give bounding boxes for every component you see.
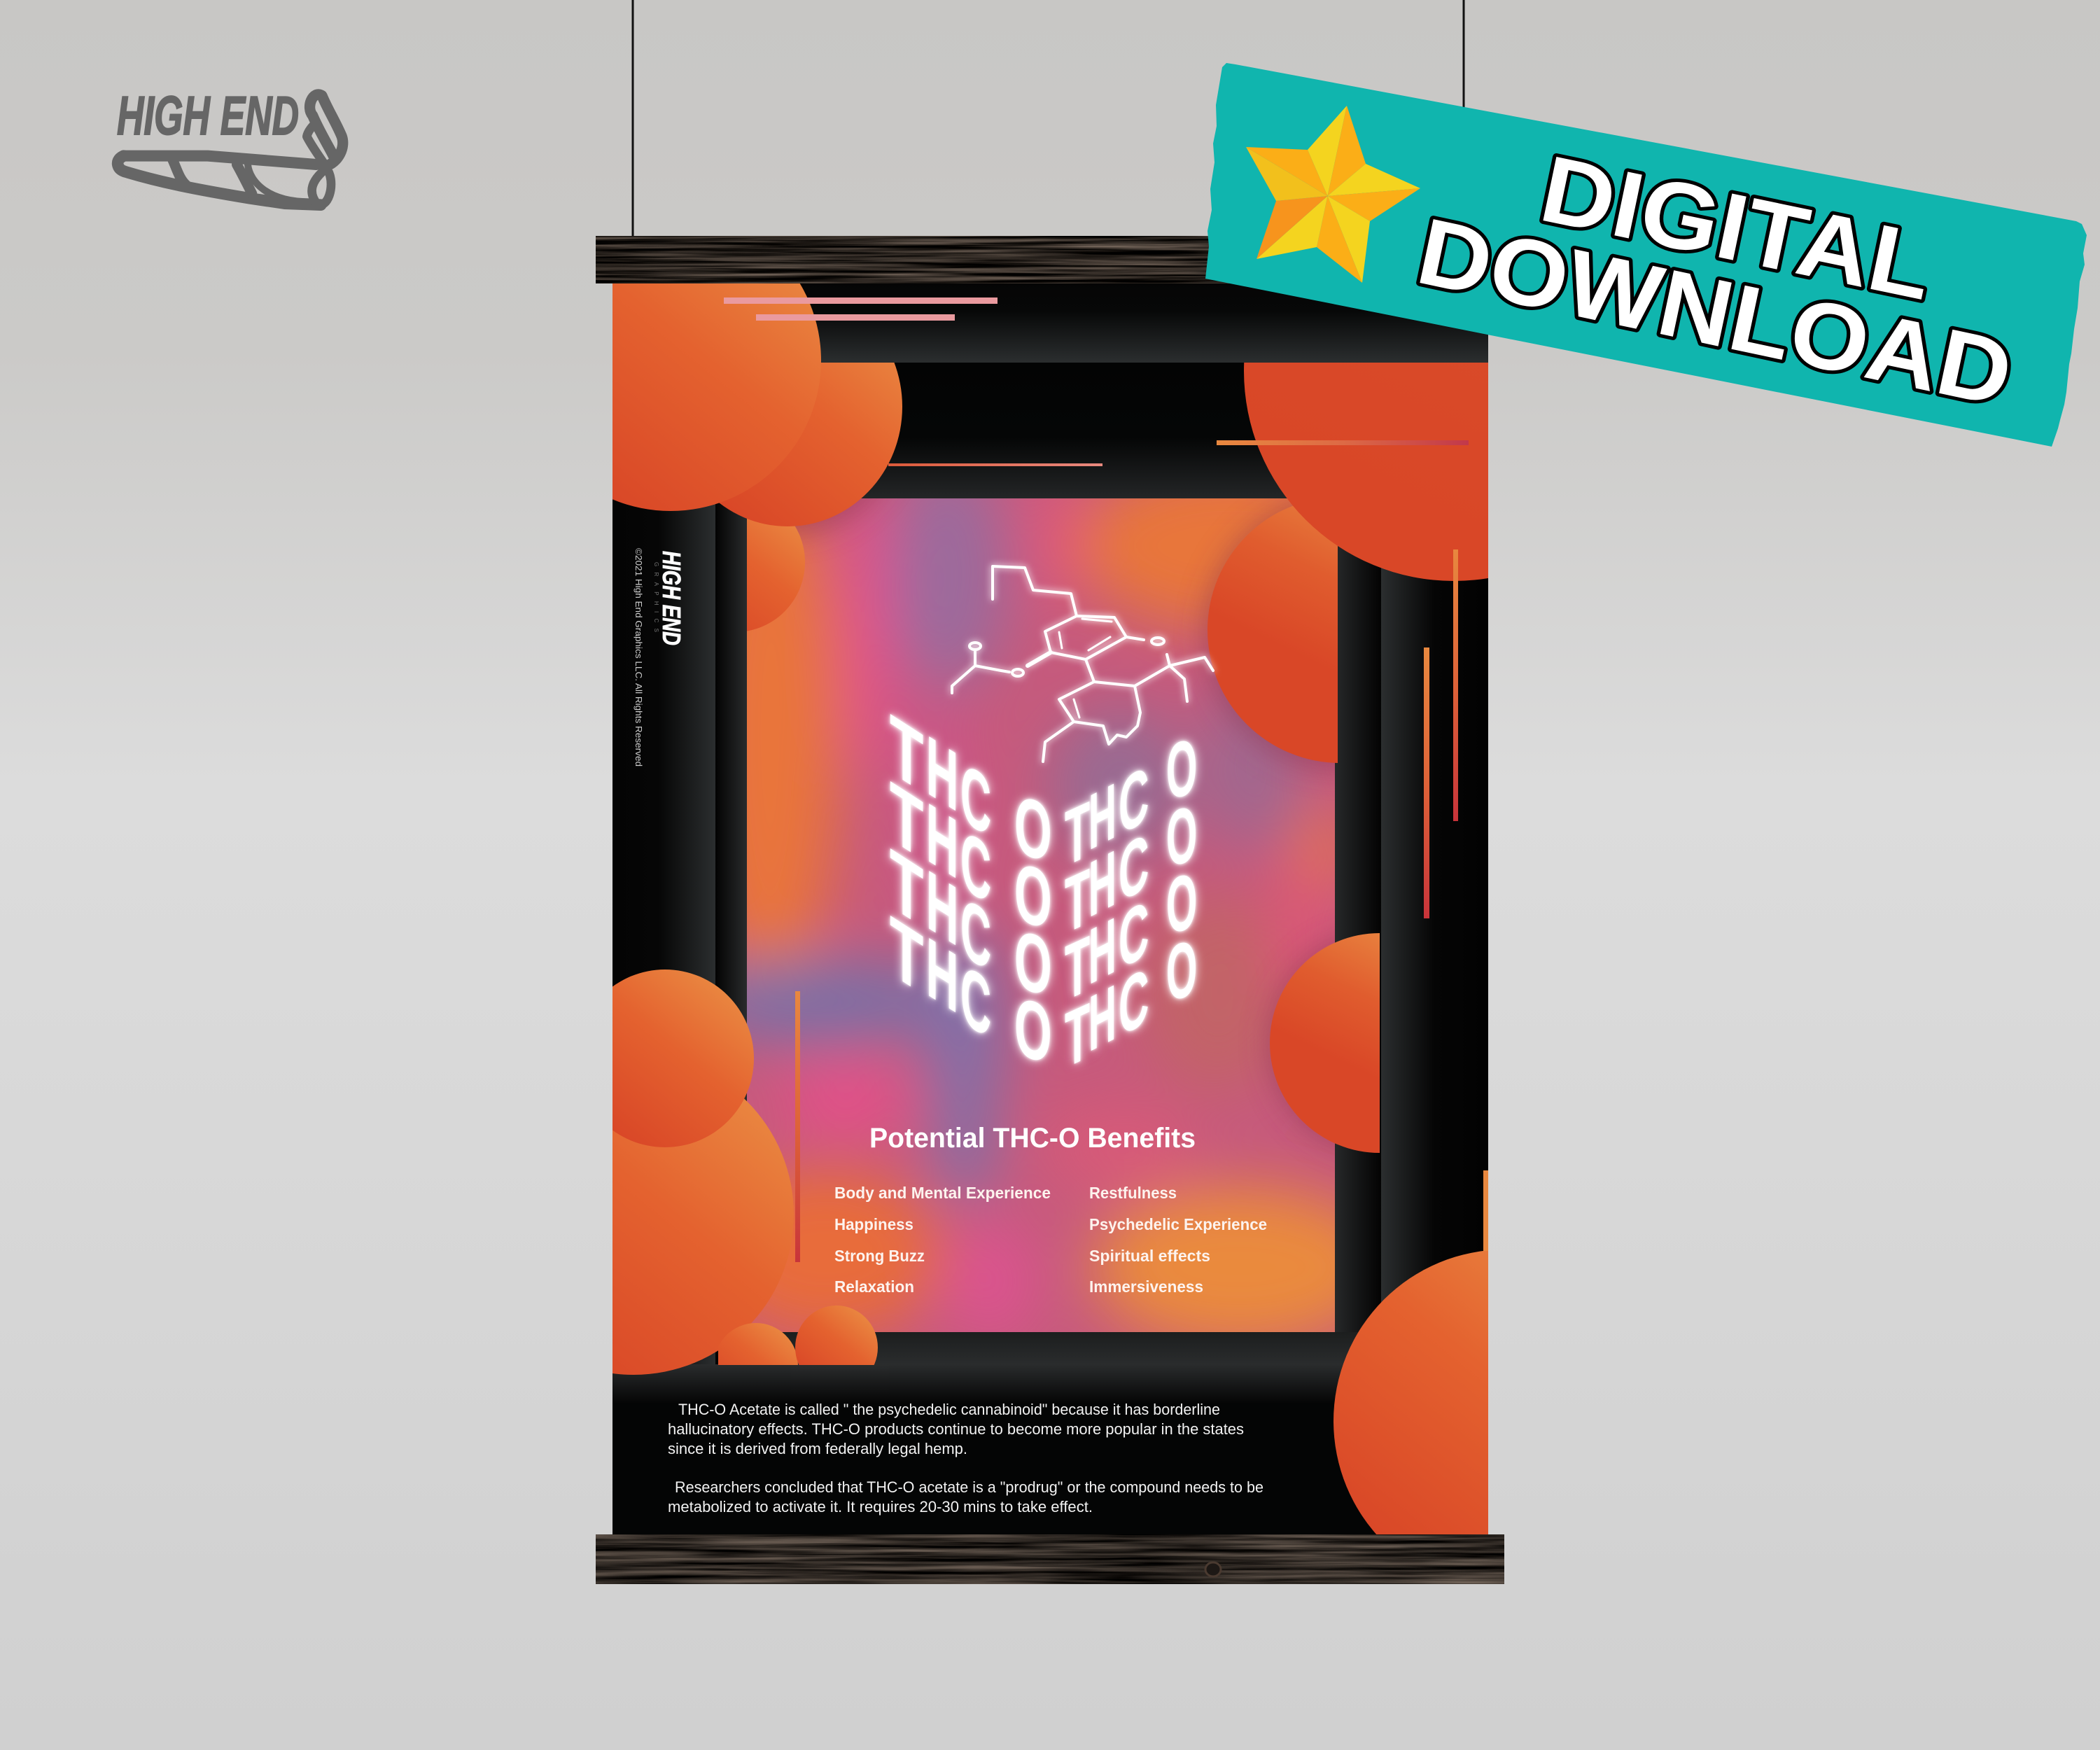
banner text: DOWNLOAD: DOWNLOAD [1409,198,2022,427]
row 4: T [1065,986,1090,1085]
benefit left column: Strong Buzz [834,1247,925,1265]
THC-O warped glowing cube [890,695,1197,1085]
row 4: T [890,897,923,1013]
wooden hanger: top [596,236,1504,284]
banner: digital download [1205,63,2087,447]
row 3: O [1014,912,1052,1014]
benefit left column: Relaxation [834,1278,914,1296]
row 4: O [1014,979,1052,1082]
wood knot [1205,1562,1221,1576]
wooden hanger: bottom [596,1534,1504,1584]
heading: Potential THC-O Benefits: Potential THC-O Benefits [869,1123,1196,1154]
row 3 [890,830,1197,1018]
description paragraphs [668,1401,1264,1516]
benefit right column: Restfulness [1089,1184,1177,1202]
row 1: T [890,695,923,811]
vertical accent line right [1424,648,1429,918]
circle: bottom small right [795,1306,878,1390]
circle shadows on panel [670,290,1492,1155]
orange accent line right [1217,440,1469,445]
circle: right small [1270,933,1490,1153]
benefit left column: Body and Mental Experience [834,1184,1051,1202]
vertical accent line left [795,991,800,1262]
benefit left column: Happiness [834,1215,913,1233]
gradient artwork panel [670,290,1492,1348]
benefit right column: Spiritual effects [1089,1247,1210,1265]
circle: top-right large [1244,161,1664,581]
circle: left lower large [473,1054,794,1375]
paragraph 2 [668,1478,1264,1516]
row 1: H [926,717,958,831]
frame: right inner strip [1335,546,1369,1332]
frame: upper inner band [861,451,1287,498]
row 2: H [1088,833,1116,935]
benefit left column [834,1184,1051,1296]
row 2 [890,762,1197,951]
row 1: T [1065,785,1090,883]
row 4: C [1119,950,1149,1054]
banner ribbon [1205,63,2087,447]
row 4: O [1166,923,1197,1017]
benefit right column: Immersiveness [1089,1278,1203,1296]
row 2: O [1166,789,1197,883]
frame: left outer strip [668,504,715,1364]
circle: right medium [1208,497,1474,763]
banner text: DIGITAL: DIGITAL [1532,136,1942,320]
row 1: O [1166,722,1197,816]
row 2: C [960,811,991,922]
icon: star [1246,106,1420,283]
vertical accent line bottom right [1483,1170,1488,1251]
row 1: C [960,744,991,855]
frame: top band [816,318,1488,363]
side wordmark: HIGH END [657,551,686,645]
circle: bottom small left [714,1323,798,1407]
benefit right column: Psychedelic Experience [1089,1215,1267,1233]
row 3: O [1166,856,1197,950]
row 2: O [1014,845,1052,947]
row 1: C [1119,748,1149,853]
copyright line: ©2021 High End Graphics LLC. All Rights Reserved [634,548,644,766]
paragraph 2: metabolized to activate it. It requires 20-30 mins to take effect. [668,1498,1093,1516]
paragraph 2: Researchers concluded that THC-O acetate is a "prodrug" or the compound needs to be [675,1478,1264,1496]
pink accent line 2 [756,314,955,321]
row 4: H [926,918,958,1032]
paragraph 1: hallucinatory effects. THC-O products continue to become more popular in the states [668,1420,1244,1438]
circle: bottom right large [1334,1250,1676,1592]
paragraph 1: since it is derived from federally legal hemp. [668,1440,967,1457]
benefits list [834,1184,1267,1296]
row 2: T [1065,852,1090,951]
poster black base [612,1404,1376,1534]
circle: top-left second [673,287,902,526]
frame: left inner strip [722,507,747,1101]
frame: fade cover [791,1365,889,1404]
row 1: H [1088,766,1116,868]
paragraph 1: THC-O Acetate is called " the psychedelic cannabinoid" because it has borderline [678,1401,1220,1418]
row 3: T [1065,919,1090,1018]
row 1 [890,695,1197,883]
side brand: High End vertical [634,548,686,766]
paragraph 1 [668,1401,1244,1457]
circle: top-left big [520,210,821,511]
vertical accent line far right [1453,550,1458,821]
frame: right outer strip [1381,420,1488,1400]
row 3: T [890,830,923,946]
logo: High End top-left [117,85,343,205]
row 4 [890,897,1197,1085]
logo wordmark: HIGH END [117,85,299,146]
circle: behind-left small in panel [665,492,805,632]
row 3: C [960,878,991,989]
molecule diagram [952,566,1213,762]
poster [612,284,1488,1534]
row 2: C [1119,816,1149,920]
icon: joint [118,94,343,205]
side sub wordmark: GRAPHICS [653,562,659,632]
circle: left lower small [576,969,754,1147]
thin accent line [888,463,1102,466]
row 1: O [1014,778,1052,880]
hanging strings [633,0,1464,238]
benefit right column [1089,1184,1267,1296]
row 3: H [1088,900,1116,1002]
row 4: C [960,946,991,1056]
pink accent line 1 [724,298,997,304]
frame: lower inner band [718,1332,1380,1364]
row 4: H [1088,967,1116,1070]
frame: lower fade band [612,1364,1382,1404]
row 2: T [890,762,923,878]
row 3: H [926,851,958,965]
row 3: C [1119,883,1149,987]
row 2: H [926,784,958,898]
